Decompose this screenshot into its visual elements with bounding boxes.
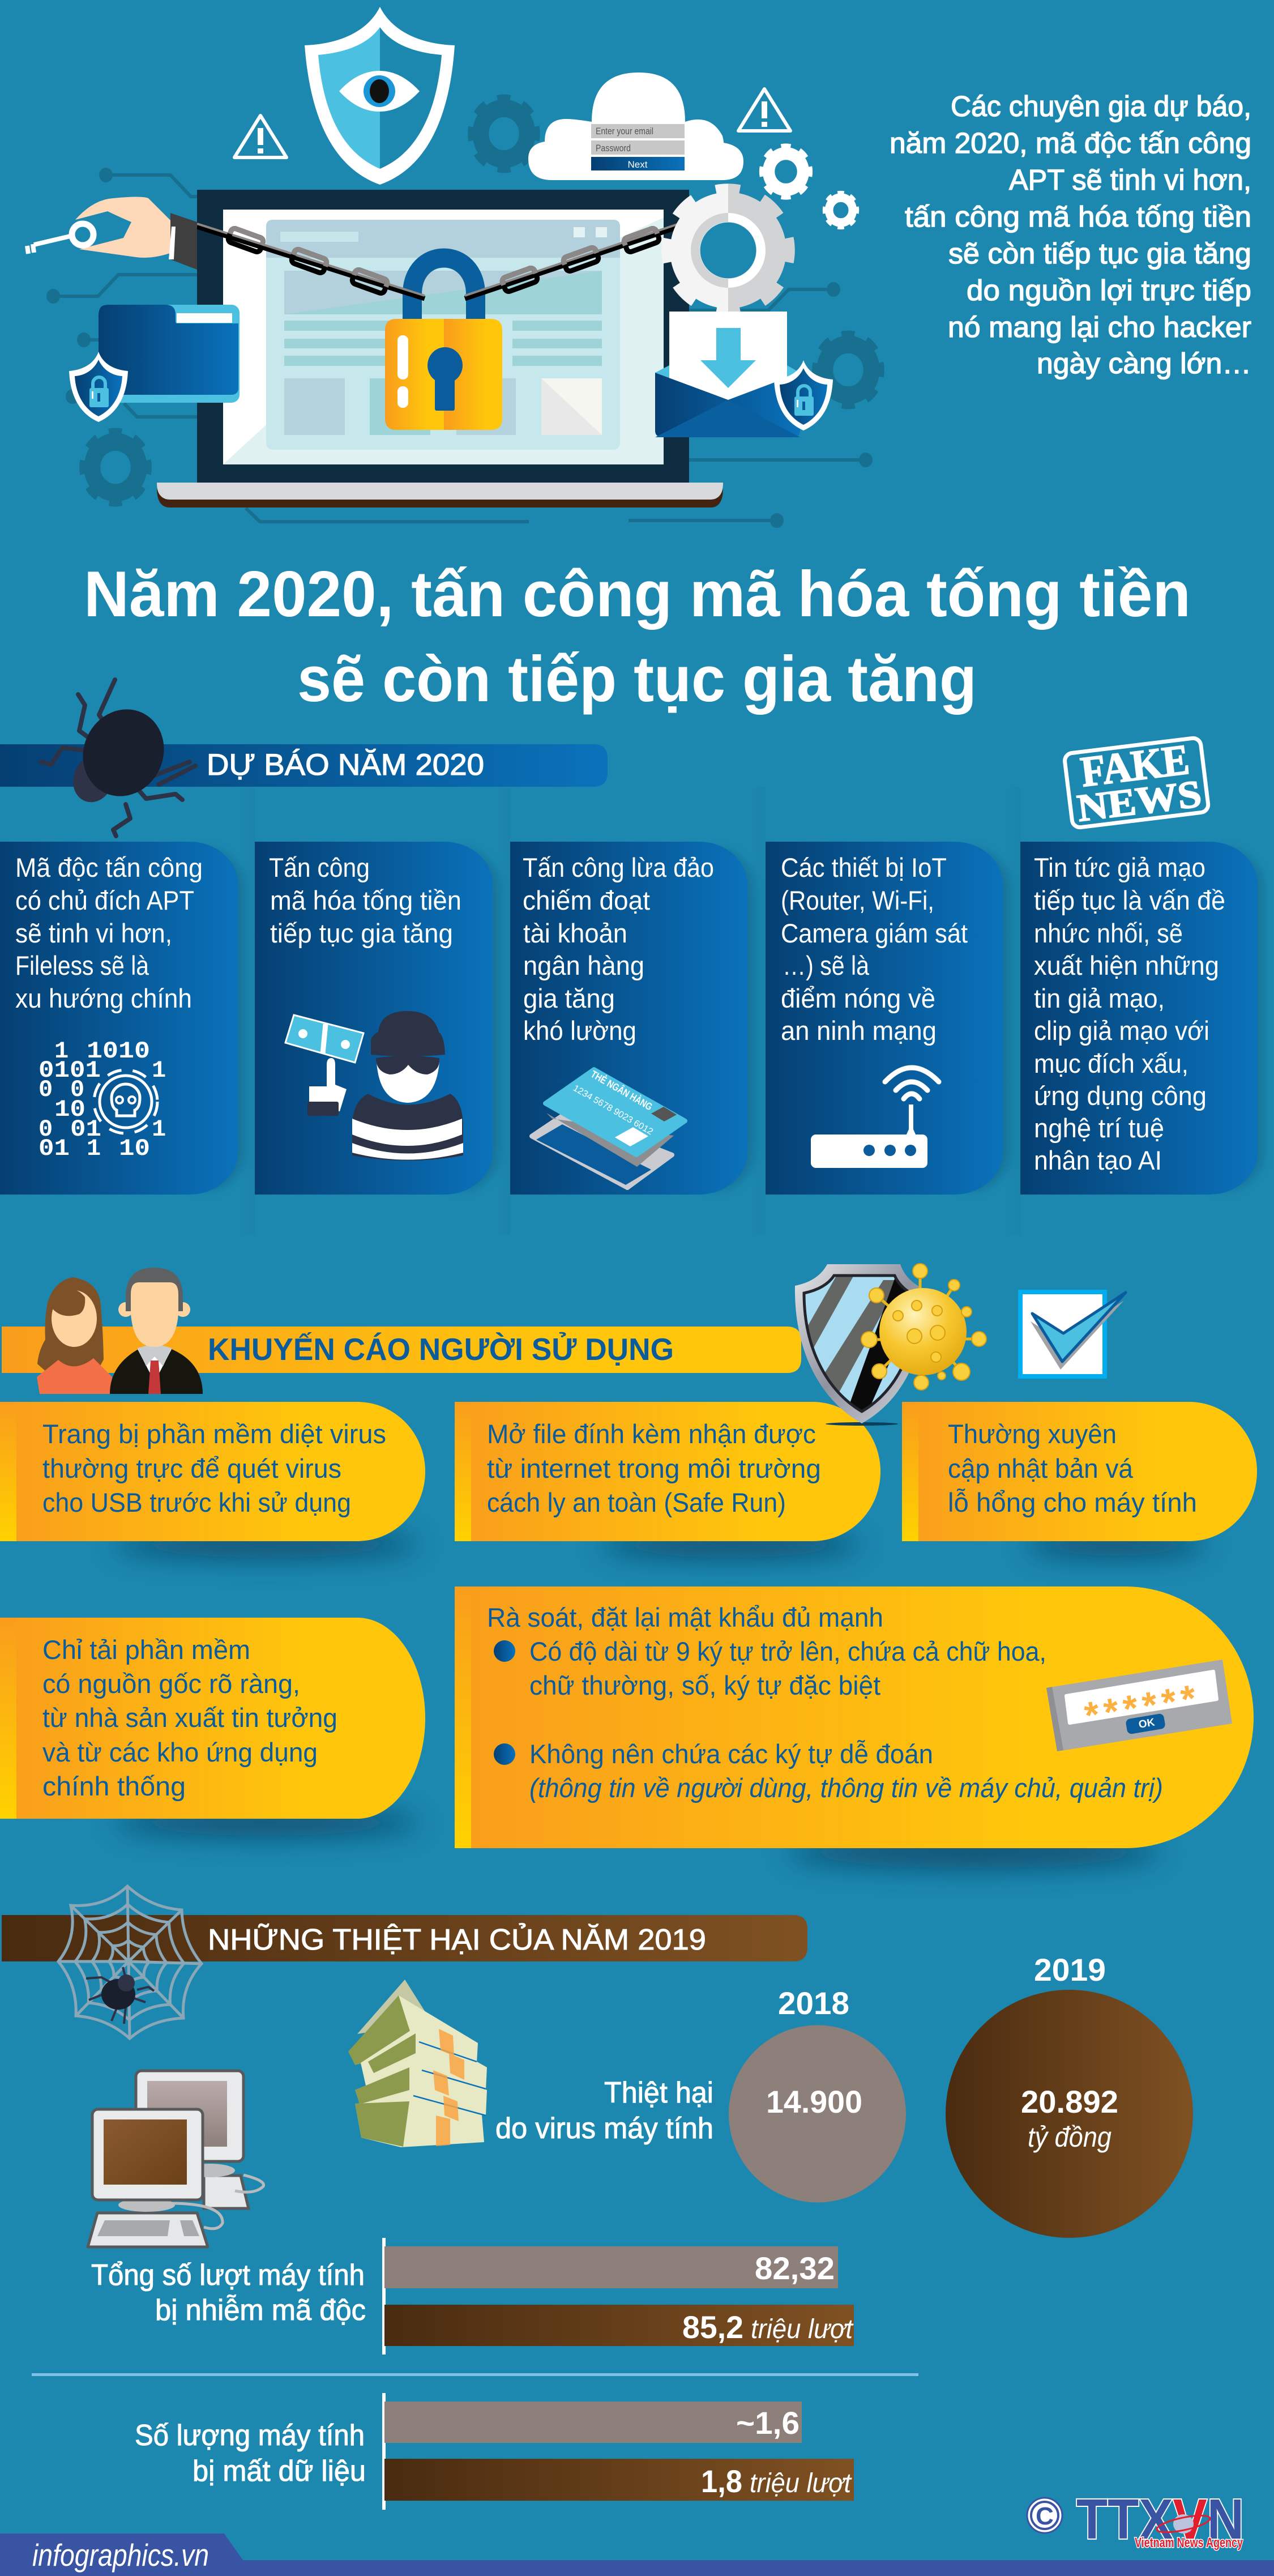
bar chart: infected computers: bị nhiễm mã độc bbox=[155, 2294, 366, 2327]
icon: password box bbox=[1046, 1660, 1232, 1751]
section bar bbox=[2, 1915, 807, 1961]
bar chart: infected computers: Tổng số lượt máy tính bbox=[91, 2259, 365, 2292]
card 4: (Router, Wi-Fi, bbox=[781, 885, 934, 915]
intro text: sẽ còn tiếp tục gia tăng bbox=[948, 237, 1251, 270]
icon: folder bbox=[99, 305, 240, 403]
circuit lines bbox=[46, 168, 873, 528]
card 5: tiếp tục là vấn đề bbox=[1034, 885, 1225, 915]
icon: bank cards: THẺ NGÂN HÀNG bbox=[589, 1068, 655, 1112]
card: trusted sources: Chỉ tải phần mềm bbox=[42, 1635, 250, 1665]
card shadows bbox=[170, 850, 1263, 1189]
panel: damages of 2019 bbox=[2, 1886, 1193, 2510]
intro text: năm 2020, mã độc tấn công bbox=[890, 127, 1251, 159]
label: damage from viruses bbox=[495, 2076, 713, 2145]
bar chart: data loss: Số lượng máy tính bbox=[135, 2419, 365, 2452]
icon: computers bbox=[88, 2071, 264, 2247]
card 4: Các thiết bị IoT bbox=[781, 852, 947, 882]
card: antivirus: thường trực để quét virus bbox=[42, 1453, 341, 1483]
divider bbox=[32, 2373, 918, 2376]
card 5: nhân tạo AI bbox=[1034, 1145, 1162, 1175]
footer bbox=[0, 2534, 1274, 2576]
icon: right mini shield bbox=[774, 360, 833, 430]
icon: warning triangles bbox=[234, 89, 790, 157]
icon: binary skull bbox=[39, 1038, 166, 1162]
icon: white gears bbox=[762, 147, 857, 227]
card: update patches bbox=[902, 1402, 1257, 1541]
card 5: clip giả mạo với bbox=[1034, 1016, 1209, 1046]
circle 2019: 2019 bbox=[1034, 1952, 1106, 1988]
laptop bbox=[157, 190, 723, 507]
card: trusted sources bbox=[0, 1618, 425, 1819]
logo: TTXVN: C bbox=[1036, 2502, 1054, 2530]
card 1: Fileless sẽ là bbox=[15, 950, 149, 980]
bar chart: data loss: ~1,6 bbox=[736, 2405, 800, 2441]
card 3: ngân hàng bbox=[523, 950, 644, 980]
circle 2019: tỷ đồng bbox=[1028, 2121, 1111, 2153]
icon: hand with key bbox=[27, 197, 197, 270]
icon: binary skull: 1 bbox=[152, 1057, 166, 1084]
card 3: khó lường bbox=[523, 1016, 636, 1046]
circle 2018: 14.900 bbox=[766, 2084, 862, 2119]
section bar bbox=[2, 1327, 801, 1373]
icon: padlock bbox=[385, 258, 502, 430]
panel: user recommendations bbox=[0, 1263, 1274, 2576]
card 5: ứng dụng công bbox=[1034, 1081, 1207, 1111]
bar chart: data loss bbox=[135, 2393, 854, 2510]
heading: KHUYẾN CÁO NGƯỜI SỬ DỤNG bbox=[208, 1332, 674, 1367]
intro text bbox=[890, 90, 1251, 379]
card 5: Tin tức giả mạo bbox=[1034, 852, 1205, 882]
title: Năm 2020, tấn công mã hóa tống tiền bbox=[84, 558, 1191, 630]
icon: big shield with eye bbox=[305, 7, 455, 185]
card: safe run: cách ly an toàn (Safe Run) bbox=[487, 1487, 786, 1517]
bar chart: data loss: triệu lượt bbox=[750, 2468, 852, 2498]
card shadows bbox=[113, 1531, 1206, 1868]
column shading bbox=[238, 787, 1020, 1235]
title: sẽ còn tiếp tục gia tăng bbox=[297, 643, 977, 715]
icon: cloud login form: Enter your email bbox=[596, 126, 653, 137]
circle 2019: 20.892 bbox=[1021, 2084, 1118, 2119]
bar chart: data loss: 1,8 bbox=[701, 2463, 742, 2499]
card 1: xu hướng chính bbox=[15, 983, 192, 1013]
card 2: tiếp tục gia tăng bbox=[270, 918, 453, 948]
card 5: xuất hiện những bbox=[1034, 950, 1219, 980]
card 3: Tấn công lừa đảo bbox=[523, 852, 714, 882]
icon: check box bbox=[1020, 1292, 1126, 1376]
icon: fake news stamp: NEWS bbox=[1075, 772, 1204, 830]
icon: binary skull: 0 bbox=[70, 1076, 84, 1103]
icon: binary skull: 1 bbox=[152, 1116, 166, 1143]
icon: shield and virus bbox=[793, 1263, 986, 1426]
bar chart: infected computers: 82,32 bbox=[755, 2250, 835, 2286]
bar chart: data loss: bị mất dữ liệu bbox=[193, 2455, 366, 2488]
card 3: chiếm đoạt bbox=[523, 885, 650, 915]
card 4: Camera giám sát bbox=[781, 918, 968, 948]
icon: binary skull: 1010 bbox=[87, 1038, 150, 1065]
card: strong password: chữ thường, số, ký tự đặc biệt bbox=[529, 1670, 880, 1700]
icon: thief with money bbox=[285, 1011, 463, 1161]
icon: binary skull: 1 bbox=[87, 1135, 101, 1162]
card 4: an ninh mạng bbox=[781, 1016, 937, 1046]
icon: fake news stamp: FAKE bbox=[1078, 736, 1192, 796]
card 1 bbox=[0, 842, 238, 1195]
card: update patches: cập nhật bản vá bbox=[948, 1453, 1134, 1483]
icon: cloud login form bbox=[528, 72, 743, 180]
card 1: Mã độc tấn công bbox=[15, 852, 203, 882]
bullets bbox=[494, 1640, 515, 1765]
icon: bank cards: 1234 5678 9023 6012 bbox=[571, 1084, 655, 1137]
card 3: tài khoản bbox=[523, 918, 627, 948]
card 5: nhức nhối, sẽ bbox=[1034, 918, 1183, 948]
icon: binary skull: 10 bbox=[54, 1096, 85, 1123]
label: damage from viruses: Thiệt hại bbox=[604, 2076, 713, 2109]
icon: binary skull: 0101 bbox=[39, 1057, 101, 1084]
panel: forecast 2020 bbox=[0, 680, 1263, 1235]
circle 2018: 2018 bbox=[778, 1985, 849, 2021]
card: strong password: Rà soát, đặt lại mật khẩu đủ mạnh bbox=[487, 1602, 883, 1632]
icon: binary skull: 0 bbox=[39, 1076, 53, 1103]
icon: wifi router bbox=[811, 1068, 939, 1168]
card: strong password: Không nên chứa các ký tự dễ đoán bbox=[529, 1739, 933, 1769]
icon: cloud login form: Next bbox=[628, 159, 648, 170]
icon: binary skull: 10 bbox=[119, 1135, 150, 1162]
intro text: APT sẽ tinh vi hơn, bbox=[1009, 164, 1251, 196]
icon: dark gears bbox=[83, 99, 880, 502]
icon: binary skull: 1 bbox=[54, 1038, 69, 1065]
icon: binary skull: 01 bbox=[39, 1135, 70, 1162]
icon: chains bbox=[197, 220, 689, 298]
card: antivirus: cho USB trước khi sử dụng bbox=[42, 1487, 351, 1517]
heading: NHỮNG THIỆT HẠI CỦA NĂM 2019 bbox=[208, 1923, 706, 1956]
icon: envelope with arrow bbox=[655, 312, 800, 437]
icon: cloud login form: Password bbox=[596, 143, 631, 153]
card: update patches: Thường xuyên bbox=[948, 1419, 1117, 1449]
heading: DỰ BÁO NĂM 2020 bbox=[207, 748, 484, 782]
bar chart: infected computers: triệu lượt bbox=[751, 2314, 854, 2344]
icon: binary skull: 0 bbox=[39, 1116, 53, 1143]
icon: left mini shield bbox=[69, 352, 128, 422]
hero illustration bbox=[27, 7, 880, 528]
card 5: mục đích xấu, bbox=[1034, 1048, 1189, 1078]
card 2 bbox=[255, 842, 493, 1195]
card: safe run: Mở file đính kèm nhận được bbox=[487, 1419, 816, 1449]
label: damage from viruses: do virus máy tính bbox=[495, 2112, 713, 2145]
icon: password box: ****** bbox=[1081, 1677, 1199, 1737]
footer: infographics.vn bbox=[32, 2537, 209, 2573]
icon: fake news stamp bbox=[1063, 734, 1209, 830]
circle 2019 bbox=[946, 1952, 1193, 2238]
card: strong password bbox=[455, 1586, 1254, 1848]
circle 2018 bbox=[729, 1985, 906, 2202]
card: safe run bbox=[455, 1402, 880, 1541]
icon: password box: OK bbox=[1138, 1716, 1156, 1731]
card 2: Tấn công bbox=[269, 852, 370, 882]
bar chart: infected computers bbox=[91, 2238, 854, 2355]
card 4 bbox=[766, 842, 1003, 1195]
icon: binary skull: 01 bbox=[70, 1116, 101, 1143]
card: trusted sources: và từ các kho ứng dụng bbox=[42, 1737, 318, 1767]
card: trusted sources: chính thống bbox=[42, 1771, 186, 1801]
intro text: ngày càng lớn… bbox=[1037, 347, 1251, 379]
card 5 bbox=[1020, 842, 1258, 1195]
icon: spider bbox=[41, 680, 195, 836]
card: safe run: từ internet trong môi trường bbox=[487, 1453, 821, 1483]
card 1: có chủ đích APT bbox=[15, 885, 194, 915]
card 5: nghệ trí tuệ bbox=[1034, 1113, 1164, 1143]
card 1: sẽ tinh vi hơn, bbox=[15, 918, 172, 948]
card: antivirus: Trang bị phần mềm diệt virus bbox=[42, 1419, 386, 1449]
section bar bbox=[0, 744, 608, 787]
icon: spider web bbox=[58, 1886, 202, 2038]
title bbox=[84, 558, 1191, 715]
card 4: …) sẽ là bbox=[783, 950, 870, 980]
bar chart: infected computers: 85,2 bbox=[682, 2309, 743, 2345]
card: antivirus bbox=[0, 1402, 425, 1541]
intro text: tấn công mã hóa tống tiền bbox=[905, 201, 1251, 233]
icon: money stack bbox=[348, 1980, 487, 2147]
intro text: Các chuyên gia dự báo, bbox=[951, 90, 1251, 122]
card 2: mã hóa tống tiền bbox=[270, 885, 461, 915]
card 3: gia tăng bbox=[523, 983, 615, 1013]
logo: TTXVN: TTXVN bbox=[1076, 2488, 1244, 2551]
icon: bank cards bbox=[532, 1068, 685, 1188]
card 3 bbox=[510, 842, 747, 1195]
card 4: điểm nóng về bbox=[781, 983, 935, 1013]
intro text: do nguồn lợi trực tiếp bbox=[967, 274, 1251, 306]
card: trusted sources: có nguồn gốc rõ ràng, bbox=[42, 1669, 300, 1699]
card: strong password: (thông tin về người dùng, thông tin về máy chủ, quản trị) bbox=[529, 1773, 1163, 1803]
card 5: tin giả mạo, bbox=[1034, 983, 1165, 1013]
intro text: nó mang lại cho hacker bbox=[948, 311, 1251, 343]
card: trusted sources: từ nhà sản xuất tin tưởng bbox=[42, 1703, 337, 1733]
card: strong password: Có độ dài từ 9 ký tự trở lên, chứa cả chữ hoa, bbox=[529, 1636, 1046, 1666]
card: update patches: lỗ hổng cho máy tính bbox=[948, 1487, 1197, 1517]
icon: big gear bbox=[669, 191, 787, 309]
icon: people bbox=[37, 1268, 203, 1394]
